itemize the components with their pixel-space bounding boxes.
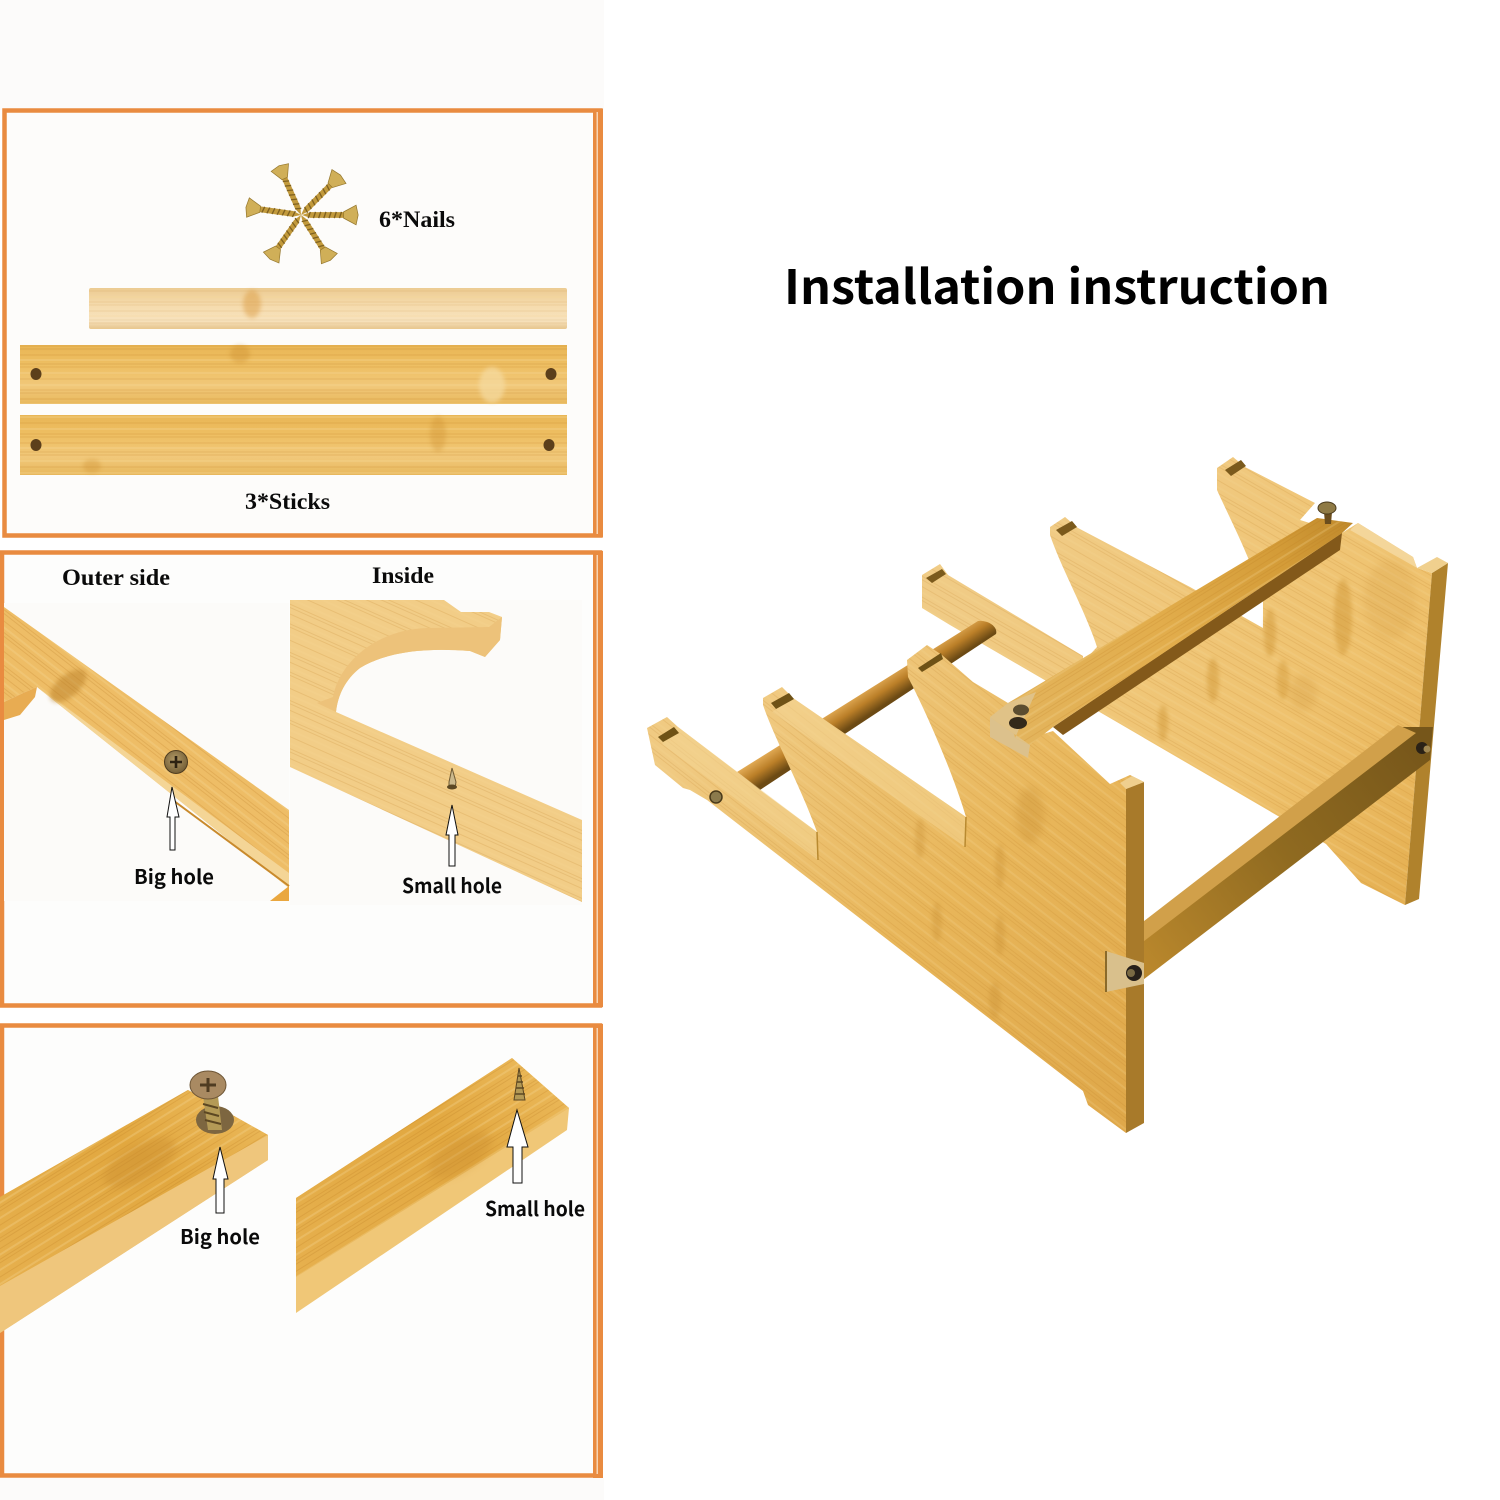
end block bbox=[990, 717, 1030, 758]
top cross beam bbox=[990, 502, 1353, 758]
panel: sticks with screws bbox=[0, 1024, 603, 1478]
label: nails: 6*Nails bbox=[379, 207, 455, 232]
label: small hole: Small hole bbox=[402, 870, 502, 899]
stick: round dowel bbox=[89, 288, 567, 329]
stick: flat two bbox=[20, 415, 567, 475]
far board edge bbox=[1405, 563, 1448, 905]
icon: screw tip bbox=[447, 768, 457, 790]
label: big hole 2: Big hole bbox=[180, 1221, 260, 1250]
photo: outer side board bbox=[4, 603, 289, 901]
tab slots on near board bbox=[658, 653, 943, 742]
icon: small screw bbox=[514, 1068, 525, 1100]
near board edge bbox=[1126, 782, 1144, 1133]
label: big hole: Big hole bbox=[134, 861, 214, 890]
screws on top beam bbox=[1013, 704, 1029, 716]
lit edge strips bbox=[662, 727, 818, 860]
icon: big screw bbox=[190, 1071, 234, 1134]
label: inside: Inside bbox=[372, 563, 434, 588]
lower cross beam bbox=[1135, 725, 1433, 986]
icon: six screws bbox=[245, 162, 358, 265]
bottom joint block bbox=[1106, 951, 1144, 992]
arrow: big hole bbox=[167, 787, 179, 850]
arrow: small hole bbox=[446, 805, 458, 866]
label: outer side: Outer side bbox=[62, 565, 170, 590]
label: small hole 2: Small hole bbox=[485, 1193, 585, 1222]
title: Installation instruction bbox=[784, 249, 1330, 318]
label: sticks: 3*Sticks bbox=[245, 489, 330, 514]
photo: inside board bbox=[290, 600, 582, 905]
panel: parts list bbox=[4, 109, 603, 537]
tab slots on far board bbox=[926, 460, 1246, 583]
stick: flat one bbox=[20, 345, 567, 404]
screw: side of near arm bbox=[710, 791, 722, 803]
near board bbox=[647, 645, 1144, 1133]
photo: right stick bbox=[296, 1058, 569, 1313]
assembled bamboo stand bbox=[647, 457, 1448, 1133]
arrow: small hole 2 bbox=[507, 1110, 528, 1183]
icon: flat screw head bbox=[164, 750, 188, 774]
dowel rod bbox=[737, 621, 996, 790]
photo: left stick bbox=[0, 1090, 268, 1333]
panel: outer side and inside bbox=[2, 551, 603, 1007]
arrow: big hole 2 bbox=[213, 1147, 228, 1213]
far board bbox=[922, 457, 1448, 905]
